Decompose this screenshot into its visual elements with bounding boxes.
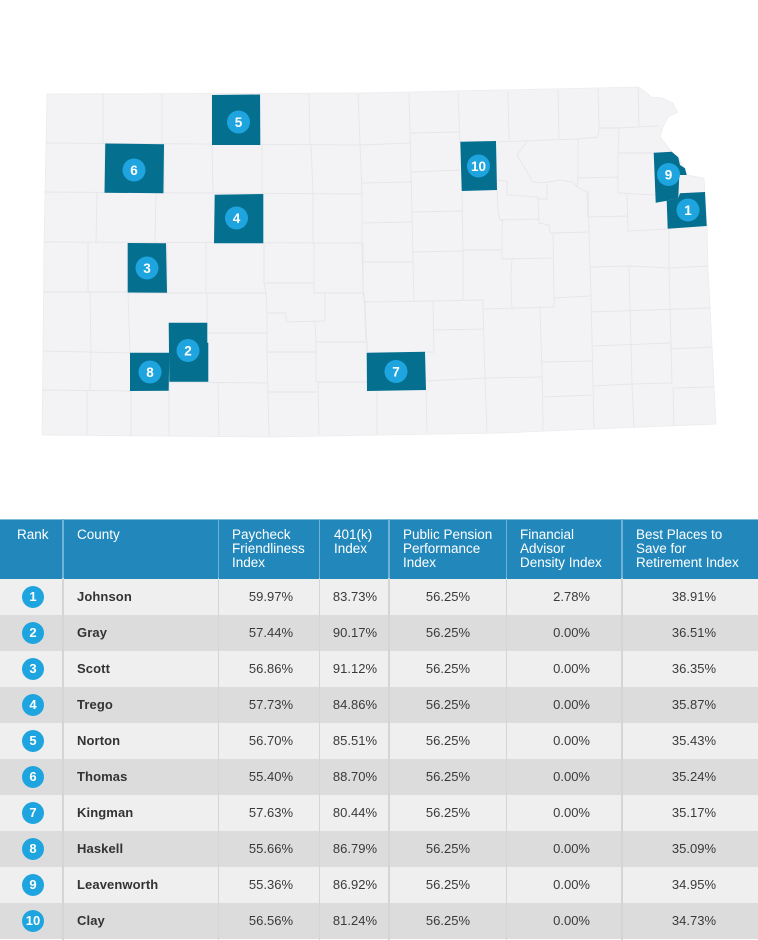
badge 8 [138, 360, 162, 384]
badge 4 [225, 206, 248, 230]
row 6: 56.25% [426, 769, 470, 784]
row 8: 86.79% [333, 841, 377, 856]
state outline [42, 87, 716, 437]
table header: Rank [17, 527, 49, 542]
row 5: Norton [77, 733, 120, 748]
row 5: 56.70% [249, 733, 293, 748]
row 9: 56.25% [426, 877, 470, 892]
row 4: 4 [29, 697, 37, 712]
row 9: 86.92% [333, 877, 377, 892]
row 9: Leavenworth [77, 877, 158, 892]
table header: 401(k) [334, 527, 372, 542]
table header: County [77, 527, 120, 542]
badge 3 [136, 256, 158, 280]
badge 1: 1 [684, 203, 692, 218]
row 2: 57.44% [249, 625, 293, 640]
badge 10 [467, 154, 490, 178]
row 7: 56.25% [426, 805, 470, 820]
row 2: 90.17% [333, 625, 377, 640]
row 9: 0.00% [553, 877, 590, 892]
row 6: Thomas [77, 769, 127, 784]
row 6: 55.40% [249, 769, 293, 784]
row 8: 35.09% [672, 841, 716, 856]
row 7: 57.63% [249, 805, 293, 820]
row 1: 59.97% [249, 589, 293, 604]
badge 6: 6 [130, 163, 138, 178]
row 4: 56.25% [426, 697, 470, 712]
row 1: Johnson [77, 589, 132, 604]
row 8: Haskell [77, 841, 123, 856]
row 8: 55.66% [249, 841, 293, 856]
row 10: 81.24% [333, 913, 377, 928]
table header: Paycheck [232, 527, 291, 542]
row 3: 56.86% [249, 661, 293, 676]
table header: Retirement Index [636, 555, 739, 570]
row 10: 34.73% [672, 913, 716, 928]
row 2: Gray [77, 625, 107, 640]
table header [0, 519, 758, 579]
map badges [122, 110, 700, 384]
row 2 [0, 615, 758, 651]
county 7: Kingman [367, 352, 426, 391]
row 7: Kingman [77, 805, 133, 820]
row 1: 2.78% [553, 589, 590, 604]
table header: Advisor [520, 541, 565, 556]
table header: Index [403, 555, 436, 570]
table header: Best Places to [636, 527, 722, 542]
badge 7 [384, 360, 408, 383]
ranking table [0, 519, 758, 940]
badge 2: 2 [184, 344, 192, 358]
badge 3: 3 [143, 261, 151, 276]
badge 5: 5 [235, 115, 243, 130]
row 10 [0, 903, 758, 939]
table header: Index [232, 555, 265, 570]
row 1: 38.91% [672, 589, 716, 604]
row 10: 0.00% [553, 913, 590, 928]
row 10: 10 [26, 913, 40, 928]
county 5: Norton [212, 94, 260, 145]
row 1: 56.25% [426, 589, 470, 604]
row 5: 0.00% [553, 733, 590, 748]
row 4: 57.73% [249, 697, 293, 712]
row 9: 34.95% [672, 877, 716, 892]
row 10: 56.56% [249, 913, 293, 928]
table header: Performance [403, 541, 480, 556]
badge 2 [176, 339, 200, 362]
row 3: 3 [29, 661, 37, 676]
county 2: Gray [169, 323, 208, 382]
row 9: 55.36% [249, 877, 293, 892]
table header: Friendliness [232, 541, 305, 556]
county 4: Trego [214, 194, 263, 243]
row 6: 35.24% [672, 769, 716, 784]
row 1 [0, 579, 758, 615]
badge 9: 9 [665, 168, 672, 182]
table header: Index [334, 541, 367, 556]
badge 8: 8 [146, 365, 154, 380]
row 6: 88.70% [333, 769, 377, 784]
table header: Financial [520, 527, 574, 542]
row 10: 56.25% [426, 913, 470, 928]
row 7: 7 [29, 805, 37, 820]
row 2: 36.51% [672, 625, 716, 640]
county 10: Clay [460, 141, 497, 191]
badge 10: 10 [471, 159, 486, 174]
row 3: 36.35% [672, 661, 716, 676]
row 1: 83.73% [333, 589, 377, 604]
row 7 [0, 795, 758, 831]
row 5: 85.51% [333, 733, 377, 748]
row 9: 9 [29, 877, 37, 892]
row 3: 0.00% [553, 661, 590, 676]
badge 4: 4 [233, 211, 241, 226]
row 7: 0.00% [553, 805, 590, 820]
row 10: Clay [77, 913, 105, 928]
row 2: 2 [29, 625, 37, 640]
row 5: 35.43% [672, 733, 716, 748]
county 1: Johnson [667, 192, 707, 229]
row 4: 0.00% [553, 697, 590, 712]
row 3 [0, 651, 758, 687]
row 8: 56.25% [426, 841, 470, 856]
row 4: Trego [77, 697, 113, 712]
table header: Density Index [520, 555, 602, 570]
row 7: 35.17% [672, 805, 716, 820]
row 6 [0, 759, 758, 795]
county 9: Leavenworth [654, 152, 687, 203]
map of Kansas counties [42, 86, 716, 438]
badge 1 [676, 198, 700, 222]
row 8: 0.00% [553, 841, 590, 856]
row 3: 91.12% [333, 661, 377, 676]
row 2: 0.00% [553, 625, 590, 640]
county borders [42, 87, 714, 437]
row 4: 35.87% [672, 697, 716, 712]
row 3: Scott [77, 661, 110, 676]
badge 5 [227, 110, 250, 134]
row 9 [0, 867, 758, 903]
county 3: Scott [128, 243, 167, 293]
table header: Public Pension [403, 527, 492, 542]
row 2: 56.25% [426, 625, 470, 640]
row 1: 1 [29, 589, 37, 604]
table header: Save for [636, 541, 686, 556]
badge 6 [122, 158, 146, 182]
row 4 [0, 687, 758, 723]
row 8: 8 [29, 841, 37, 856]
row 3: 56.25% [426, 661, 470, 676]
badge 9 [657, 163, 680, 186]
row 5: 5 [29, 733, 37, 748]
row 6: 6 [29, 769, 37, 784]
county 8: Haskell [130, 353, 169, 391]
row 4: 84.86% [333, 697, 377, 712]
row 8 [0, 831, 758, 867]
row 6: 0.00% [553, 769, 590, 784]
row 7: 80.44% [333, 805, 377, 820]
row 5: 56.25% [426, 733, 470, 748]
badge 7: 7 [392, 364, 400, 380]
county 6: Thomas [104, 144, 164, 193]
row 5 [0, 723, 758, 759]
